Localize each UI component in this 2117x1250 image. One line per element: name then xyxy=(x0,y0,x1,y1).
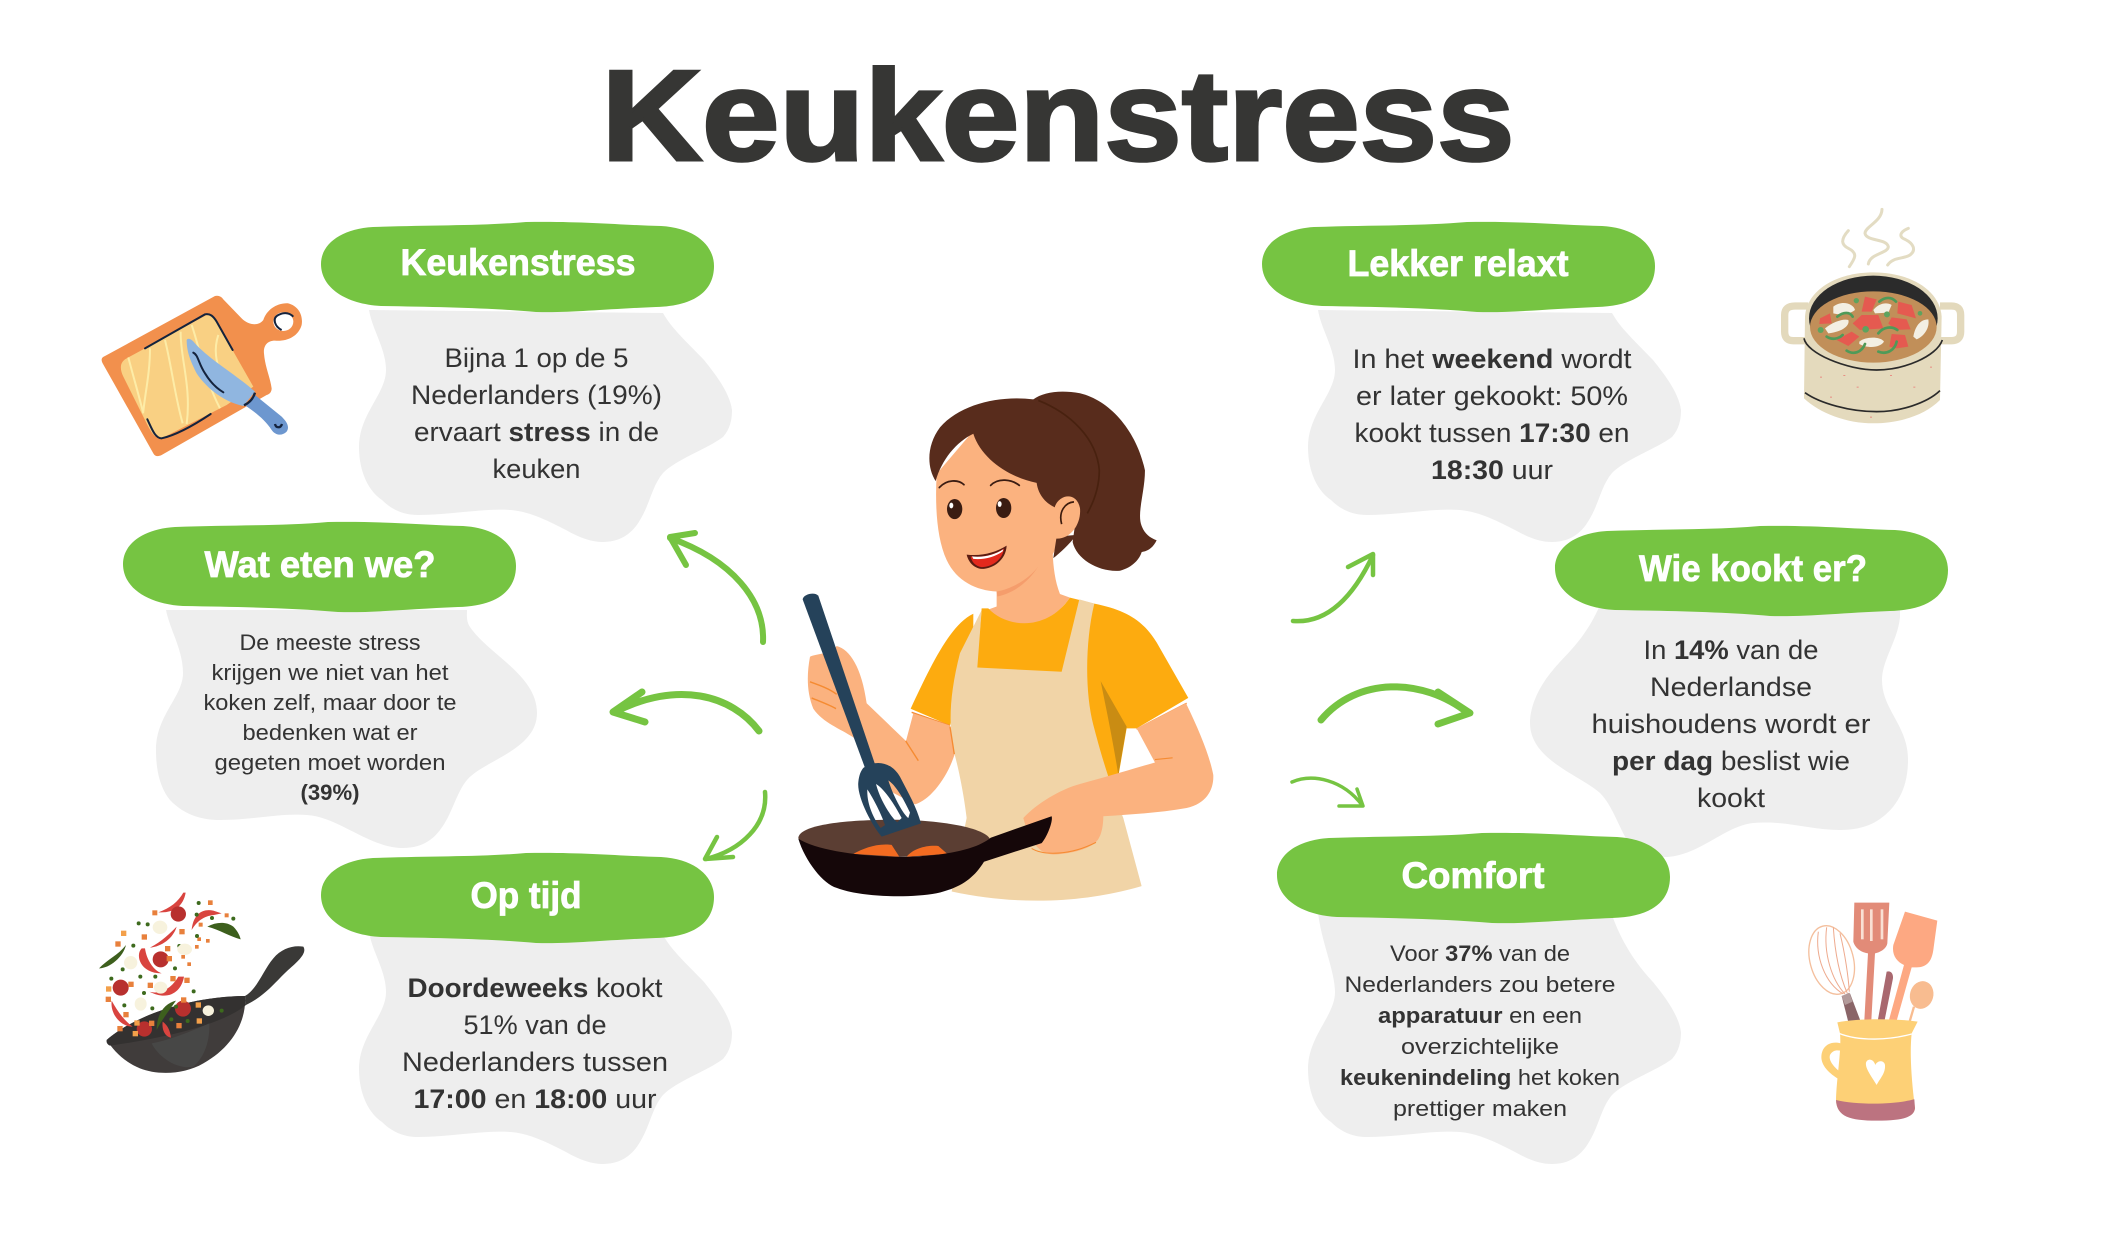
heading pill xyxy=(321,222,714,312)
panel: wie kookt er xyxy=(1530,526,1948,857)
shirt xyxy=(911,598,1188,777)
arrow: to wie kookt er xyxy=(1321,687,1470,724)
panel: lekker relaxt xyxy=(1262,222,1681,542)
body text: keuken xyxy=(492,454,580,484)
body text: overzichtelijke xyxy=(1401,1034,1559,1059)
body text: 17:00 en 18:00 uur xyxy=(414,1084,657,1114)
heading pill xyxy=(321,853,714,943)
body text: er later gekookt: 50% xyxy=(1356,381,1628,411)
heading pill xyxy=(1262,222,1655,312)
body text: 51% van de xyxy=(464,1010,606,1040)
body text xyxy=(411,343,662,484)
arrow: to lekker relaxt xyxy=(1293,554,1373,621)
right arm xyxy=(1023,703,1213,855)
pan inside xyxy=(798,820,991,857)
body text: ervaart stress in de xyxy=(414,417,659,447)
body text xyxy=(1592,635,1870,813)
arrow: to comfort xyxy=(1292,778,1363,806)
text blob xyxy=(1530,605,1908,857)
body text: (39%) xyxy=(300,780,360,805)
text blob xyxy=(359,310,732,542)
body text: De meeste stress xyxy=(240,630,420,655)
body text: Nederlanders zou betere xyxy=(1344,972,1616,997)
body text: koken zelf, maar door te xyxy=(204,690,456,715)
hair back and ponytail xyxy=(1033,392,1157,571)
icon: cutting board and knife xyxy=(102,296,302,456)
head xyxy=(936,431,1058,591)
body text xyxy=(1340,941,1620,1121)
body text: In het weekend wordt xyxy=(1352,344,1632,374)
body text: per dag beslist wie xyxy=(1612,746,1850,776)
body text: bedenken wat er xyxy=(242,720,418,745)
sleeve trim xyxy=(912,703,1187,729)
body text: huishoudens wordt er xyxy=(1592,709,1870,739)
body text: kookt xyxy=(1697,783,1766,813)
text blob xyxy=(156,610,537,848)
apron shadow xyxy=(1101,681,1127,775)
body text: Voor 37% van de xyxy=(1390,941,1570,966)
body text: Bijna 1 op de 5 xyxy=(444,343,628,373)
spatula xyxy=(803,594,921,837)
heading pill xyxy=(123,522,516,612)
body text: Nederlanders (19%) xyxy=(411,380,662,410)
panel: op tijd xyxy=(321,853,732,1164)
neck xyxy=(987,553,1070,624)
heading: Op tijd xyxy=(470,875,582,916)
body text: apparatuur en een xyxy=(1378,1003,1582,1028)
ear xyxy=(1055,496,1080,539)
arrow: to keukenstress xyxy=(670,533,763,642)
icon: utensil jar xyxy=(1802,903,1937,1121)
illustration: woman cooking xyxy=(798,392,1213,901)
heading pill xyxy=(1277,833,1670,923)
body text: krijgen we niet van het xyxy=(212,660,449,685)
text blob xyxy=(359,932,732,1164)
body text: Doordeweeks kookt xyxy=(408,973,663,1003)
panel: keukenstress xyxy=(321,222,732,542)
salmon xyxy=(853,845,947,857)
panel: wat eten we xyxy=(123,522,537,848)
body text xyxy=(1352,344,1632,485)
eyes and brows xyxy=(939,480,1019,519)
left arm and hand xyxy=(808,646,954,804)
mouth xyxy=(967,546,1007,569)
heading: Wat eten we? xyxy=(204,544,436,585)
heading: Wie kookt er? xyxy=(1639,548,1867,589)
apron xyxy=(951,599,1142,901)
body text xyxy=(402,973,668,1114)
hair front xyxy=(929,398,1099,510)
body text: gegeten moet worden xyxy=(214,750,446,775)
heading: Keukenstress xyxy=(400,242,636,283)
pan xyxy=(798,816,1052,896)
text blob xyxy=(1308,310,1681,542)
heading: Lekker relaxt xyxy=(1348,243,1568,284)
title: Keukenstress xyxy=(602,44,1514,188)
body text: In 14% van de xyxy=(1644,635,1818,665)
heading: Comfort xyxy=(1402,855,1544,896)
body text: keukenindeling het koken xyxy=(1340,1065,1620,1090)
body text: prettiger maken xyxy=(1393,1096,1567,1121)
body text: 18:30 uur xyxy=(1431,455,1553,485)
body text: kookt tussen 17:30 en xyxy=(1354,418,1630,448)
icon: wok with flying vegetables xyxy=(99,893,304,1073)
panel: comfort xyxy=(1277,833,1681,1164)
arrow: to wat eten we xyxy=(613,692,759,731)
body text: Nederlandse xyxy=(1650,672,1812,702)
heading pill xyxy=(1555,526,1948,616)
body text: Nederlanders tussen xyxy=(402,1047,668,1077)
body text xyxy=(204,630,456,805)
text blob xyxy=(1308,912,1681,1164)
arrow: to op tijd xyxy=(705,792,765,859)
icon: steaming pot xyxy=(1785,209,1961,423)
